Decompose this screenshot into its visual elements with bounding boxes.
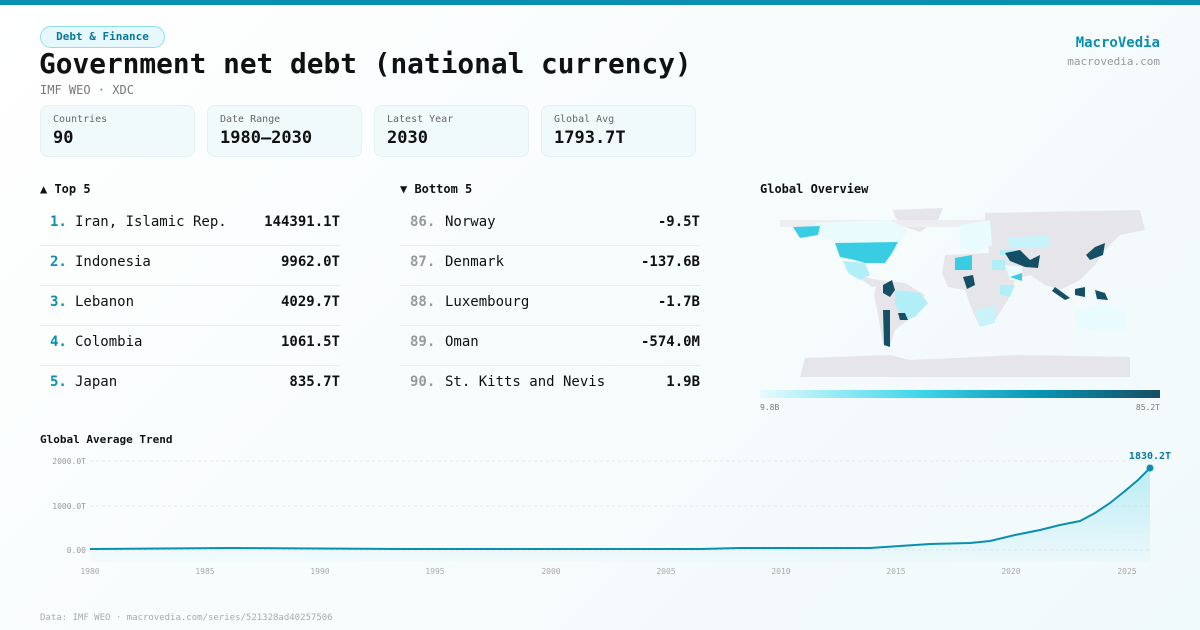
brand — [1067, 35, 1160, 68]
footer source: Data: IMF WEO · macrovedia.com/series/521328ad40257506 — [40, 613, 333, 623]
subtitle: IMF WEO · XDC — [40, 83, 134, 97]
line chart: 2000 — [541, 567, 561, 576]
panel: top 5 — [40, 182, 340, 390]
band — [780, 220, 1140, 227]
panel: bottom 5: -9.5T — [658, 214, 700, 230]
line chart: 1830.2T — [1129, 451, 1171, 462]
heading: top 5: ▲ Top 5 — [40, 182, 91, 196]
panel: top 5: 2. — [50, 254, 67, 270]
color scale legend: 85.2T — [1136, 403, 1160, 412]
stat card: countries — [40, 105, 195, 157]
paraguay — [898, 313, 908, 320]
panel: top 5: 835.7T — [289, 374, 340, 390]
panel: bottom 5: 89. — [410, 334, 435, 350]
brazil — [895, 290, 928, 320]
stat card: countries: Countries — [53, 114, 107, 125]
panel: top 5: 9962.0T — [281, 254, 340, 270]
stat card: date range: Date Range — [220, 114, 280, 125]
panel: top 5: 4. — [50, 334, 67, 350]
panel: bottom 5: Luxembourg — [445, 294, 529, 310]
stat card: date range: 1980–2030 — [220, 128, 312, 148]
color scale legend — [760, 390, 1160, 412]
panel: bottom 5: St. Kitts and Nevis — [445, 374, 605, 390]
indonesia — [1052, 287, 1070, 300]
europe — [960, 220, 992, 253]
africa — [942, 253, 1015, 327]
chile — [883, 310, 890, 347]
algeria — [955, 255, 972, 270]
panel: top 5: Indonesia — [75, 254, 151, 270]
egypt, ethiopia — [992, 260, 1005, 270]
panel: bottom 5 — [400, 182, 700, 390]
category tag: Debt & Finance — [56, 30, 149, 43]
panel: top 5: Colombia — [75, 334, 142, 350]
panel: top 5: 1061.5T — [281, 334, 340, 350]
panel: bottom 5: -574.0M — [641, 334, 700, 350]
stat card: date range — [207, 105, 362, 157]
line chart: 2000.0T — [52, 457, 86, 466]
stat card: global avg — [541, 105, 696, 157]
alaska — [793, 226, 820, 238]
stat card: global avg: Global Avg — [554, 114, 614, 125]
panel: bottom 5: 90. — [410, 374, 435, 390]
iran/pakistan — [1005, 250, 1040, 268]
panel: bottom 5: Norway — [445, 214, 496, 230]
stat card: countries: 90 — [53, 128, 73, 148]
panel: top 5: 144391.1T — [264, 214, 340, 230]
australia — [1075, 303, 1127, 333]
nigeria — [963, 275, 975, 289]
panel: bottom 5: Denmark — [445, 254, 504, 270]
line chart: 2025 — [1117, 567, 1137, 576]
map — [780, 208, 1145, 377]
line chart: 1980 — [80, 567, 100, 576]
arabia — [1005, 265, 1022, 280]
central america — [855, 275, 885, 287]
panel: top 5: Iran, Islamic Rep. — [75, 214, 227, 230]
top accent bar — [0, 0, 1200, 5]
panel: top 5: Lebanon — [75, 294, 134, 310]
line chart: 2015 — [886, 567, 906, 576]
title: Government net debt (national currency) — [39, 47, 692, 80]
panel: top 5: 4029.7T — [281, 294, 340, 310]
line chart: 1990 — [310, 567, 330, 576]
turkey — [1000, 250, 1018, 255]
mexico — [843, 261, 870, 280]
stat card: latest year: 2030 — [387, 128, 428, 148]
eurasia — [985, 210, 1145, 290]
panel: bottom 5: 1.9B — [666, 374, 700, 390]
line chart: 0.00 — [67, 546, 86, 555]
stat card: global avg: 1793.7T — [554, 128, 626, 148]
line chart: 1985 — [195, 567, 215, 576]
panel: bottom 5: 87. — [410, 254, 435, 270]
south africa — [975, 305, 995, 327]
panel: top 5: 1. — [50, 214, 67, 230]
category tag — [40, 26, 165, 48]
line chart: 2005 — [656, 567, 676, 576]
brand: macrovedia.com — [1067, 55, 1160, 68]
canada — [815, 220, 908, 243]
kazakhstan — [1007, 235, 1050, 247]
line chart: 1000.0T — [52, 502, 86, 511]
line chart: 2010 — [771, 567, 791, 576]
stat card: latest year: Latest Year — [387, 114, 453, 125]
heading: bottom 5: ▼ Bottom 5 — [400, 182, 472, 196]
panel: top 5: 5. — [50, 374, 67, 390]
yemen — [1010, 273, 1022, 281]
heading: global overview: Global Overview — [760, 182, 868, 196]
panel: top 5: 3. — [50, 294, 67, 310]
brand: MacroVedia — [1076, 35, 1160, 51]
color scale legend: 9.8B — [760, 403, 779, 412]
panel: bottom 5: 86. — [410, 214, 435, 230]
south america — [874, 280, 925, 347]
line chart — [52, 451, 1171, 576]
antarctica — [800, 355, 1130, 377]
panel: bottom 5: -1.7B — [658, 294, 700, 310]
panel: bottom 5: Oman — [445, 334, 479, 350]
heading: global average trend: Global Average Trend — [40, 433, 172, 446]
greenland — [893, 208, 943, 232]
line chart: 1995 — [425, 567, 445, 576]
panel: bottom 5: 88. — [410, 294, 435, 310]
usa — [835, 242, 898, 263]
panel: bottom 5: -137.6B — [641, 254, 700, 270]
colombia — [883, 280, 895, 297]
panel: top 5: Japan — [75, 374, 117, 390]
line chart: 2020 — [1001, 567, 1021, 576]
stat card: latest year — [374, 105, 529, 157]
japan — [1086, 243, 1105, 260]
